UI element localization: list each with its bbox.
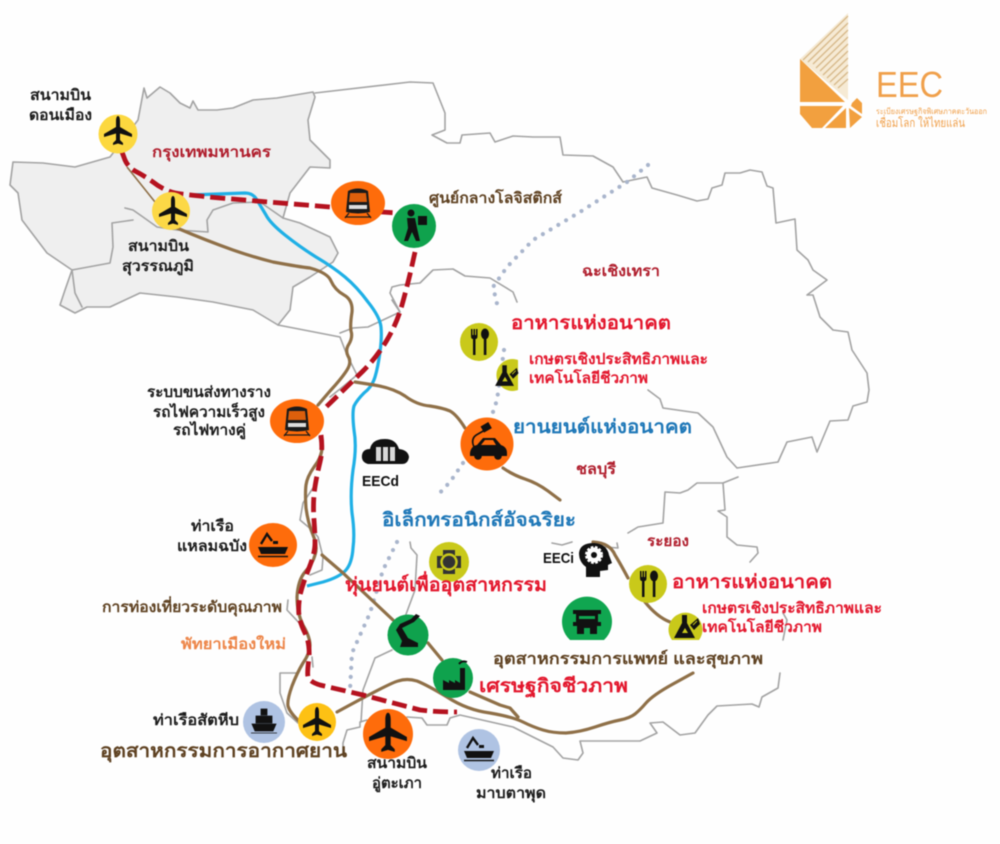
marker: Don Mueang airport <box>98 114 138 154</box>
label: Laem Chabang: ท่าเรือ <box>191 518 234 535</box>
dotted railway line <box>350 165 648 690</box>
label: Suvarnabhumi: สุวรรณภูมิ <box>122 257 194 276</box>
logo: EEC: EEC <box>876 64 943 105</box>
label: Suvarnabhumi <box>122 237 194 276</box>
label: U-Tapao: สนามบิน <box>367 754 428 772</box>
marker: train upper <box>331 181 385 225</box>
label: EECi: EECi <box>543 550 574 567</box>
label: quality tourism: การท่องเที่ยวระดับคุณภาพ <box>102 596 282 617</box>
label: agri-bio 1: เกษตรเชิงประสิทธิภาพและ <box>529 350 708 368</box>
label: Sattahip port: ท่าเรือสัตหีบ <box>153 712 239 729</box>
map: Bangkok region shading <box>10 87 338 325</box>
map: province boundaries <box>278 82 869 760</box>
marker: future vehicles <box>460 418 514 470</box>
label: medical industry: อุตสาหกรรมการแพทย์ และสุขภาพ <box>493 649 763 669</box>
label: Chonburi: ชลบุรี <box>576 461 617 479</box>
brown road network <box>127 167 693 733</box>
label: agri-bio 2: เทคโนโลยีชีวภาพ <box>702 617 822 636</box>
label: Rayong: ระยอง <box>647 533 689 550</box>
label: agri-bio 2 <box>702 599 882 636</box>
logo: EEC: เชื่อมโลก ให้ไทยแล่น <box>876 114 965 130</box>
label: Don Mueang: ดอนเมือง <box>29 107 92 124</box>
marker: future food 2 <box>629 565 667 603</box>
label: rail systems <box>147 384 271 440</box>
logo: EEC: ระเบียงเศรษฐกิจพิเศษภาคตะวันออก <box>876 107 987 116</box>
label: Map Ta Phut <box>476 765 546 803</box>
heading: future vehicles: ยานยนต์แห่งอนาคต <box>513 416 692 438</box>
label: Bangkok: กรุงเทพมหานคร <box>152 144 272 162</box>
heading: bio-economy: เศรษฐกิจชีวภาพ <box>479 675 628 699</box>
label: new Pattaya: พัทยาเมืองใหม่ <box>181 635 286 653</box>
marker: U-Tapao airport <box>363 709 413 759</box>
label: Don Mueang <box>29 86 92 124</box>
heading: aviation industry: อุตสาหกรรมการอากาศยาน <box>100 741 347 763</box>
marker: logistics hub <box>392 204 436 248</box>
label: Map Ta Phut: มาบตาพุด <box>476 785 546 803</box>
marker: agri-bio 1 <box>495 359 518 391</box>
icon: EECi head <box>579 543 612 577</box>
label: rail systems: รถไฟทางคู่ <box>173 420 246 440</box>
label: rail systems: ระบบขนส่งทางราง <box>147 384 271 401</box>
red dashed high-speed rail line <box>122 152 457 712</box>
label: Map Ta Phut: ท่าเรือ <box>491 765 532 782</box>
marker: future food 1 <box>460 323 498 361</box>
label: Don Mueang: สนามบิน <box>30 86 92 104</box>
marker: aviation airport <box>298 703 336 741</box>
marker: medical <box>562 597 612 640</box>
marker: Map Ta Phut port <box>458 729 500 771</box>
marker: Laem Chabang port <box>249 523 297 567</box>
label: Chachoengsao: ฉะเชิงเทรา <box>582 262 660 280</box>
label: EECd: EECd <box>362 473 399 490</box>
label: agri-bio 2: เกษตรเชิงประสิทธิภาพและ <box>702 599 882 617</box>
heading: future food 2: อาหารแห่งอนาคต <box>672 572 832 593</box>
label: agri-bio 1: เทคโนโลยีชีวภาพ <box>529 368 648 387</box>
blue motorway line <box>190 193 381 586</box>
label: Laem Chabang: แหลมฉบัง <box>177 538 247 555</box>
marker: electronics chip <box>429 542 469 582</box>
marker: bio-economy factory <box>433 658 473 698</box>
label: U-Tapao <box>367 754 428 793</box>
label: Suvarnabhumi: สนามบิน <box>128 237 190 255</box>
label: U-Tapao: อู่ตะเภา <box>372 775 422 793</box>
marker: train middle <box>270 399 324 443</box>
label: logistics hub: ศูนย์กลางโลจิสติกส์ <box>429 188 563 208</box>
logo: EEC <box>800 13 987 130</box>
heading: robotics: หุ่นยนต์เพื่ออุตสาหกรรม <box>345 571 547 597</box>
marker: Sattahip port <box>243 701 285 743</box>
label: agri-bio 1 <box>529 350 708 387</box>
icon: EECd cloud <box>362 439 409 464</box>
label: Laem Chabang <box>177 518 247 555</box>
label: rail systems: รถไฟความเร็วสูง <box>153 402 265 422</box>
marker: robotics <box>388 614 428 656</box>
heading: future food 1: อาหารแห่งอนาคต <box>511 313 671 334</box>
marker: agri-bio 2 <box>669 613 702 640</box>
marker: Suvarnabhumi airport <box>152 192 190 230</box>
heading: smart electronics: อิเล็กทรอนิกส์อัจฉริยะ <box>382 507 576 531</box>
